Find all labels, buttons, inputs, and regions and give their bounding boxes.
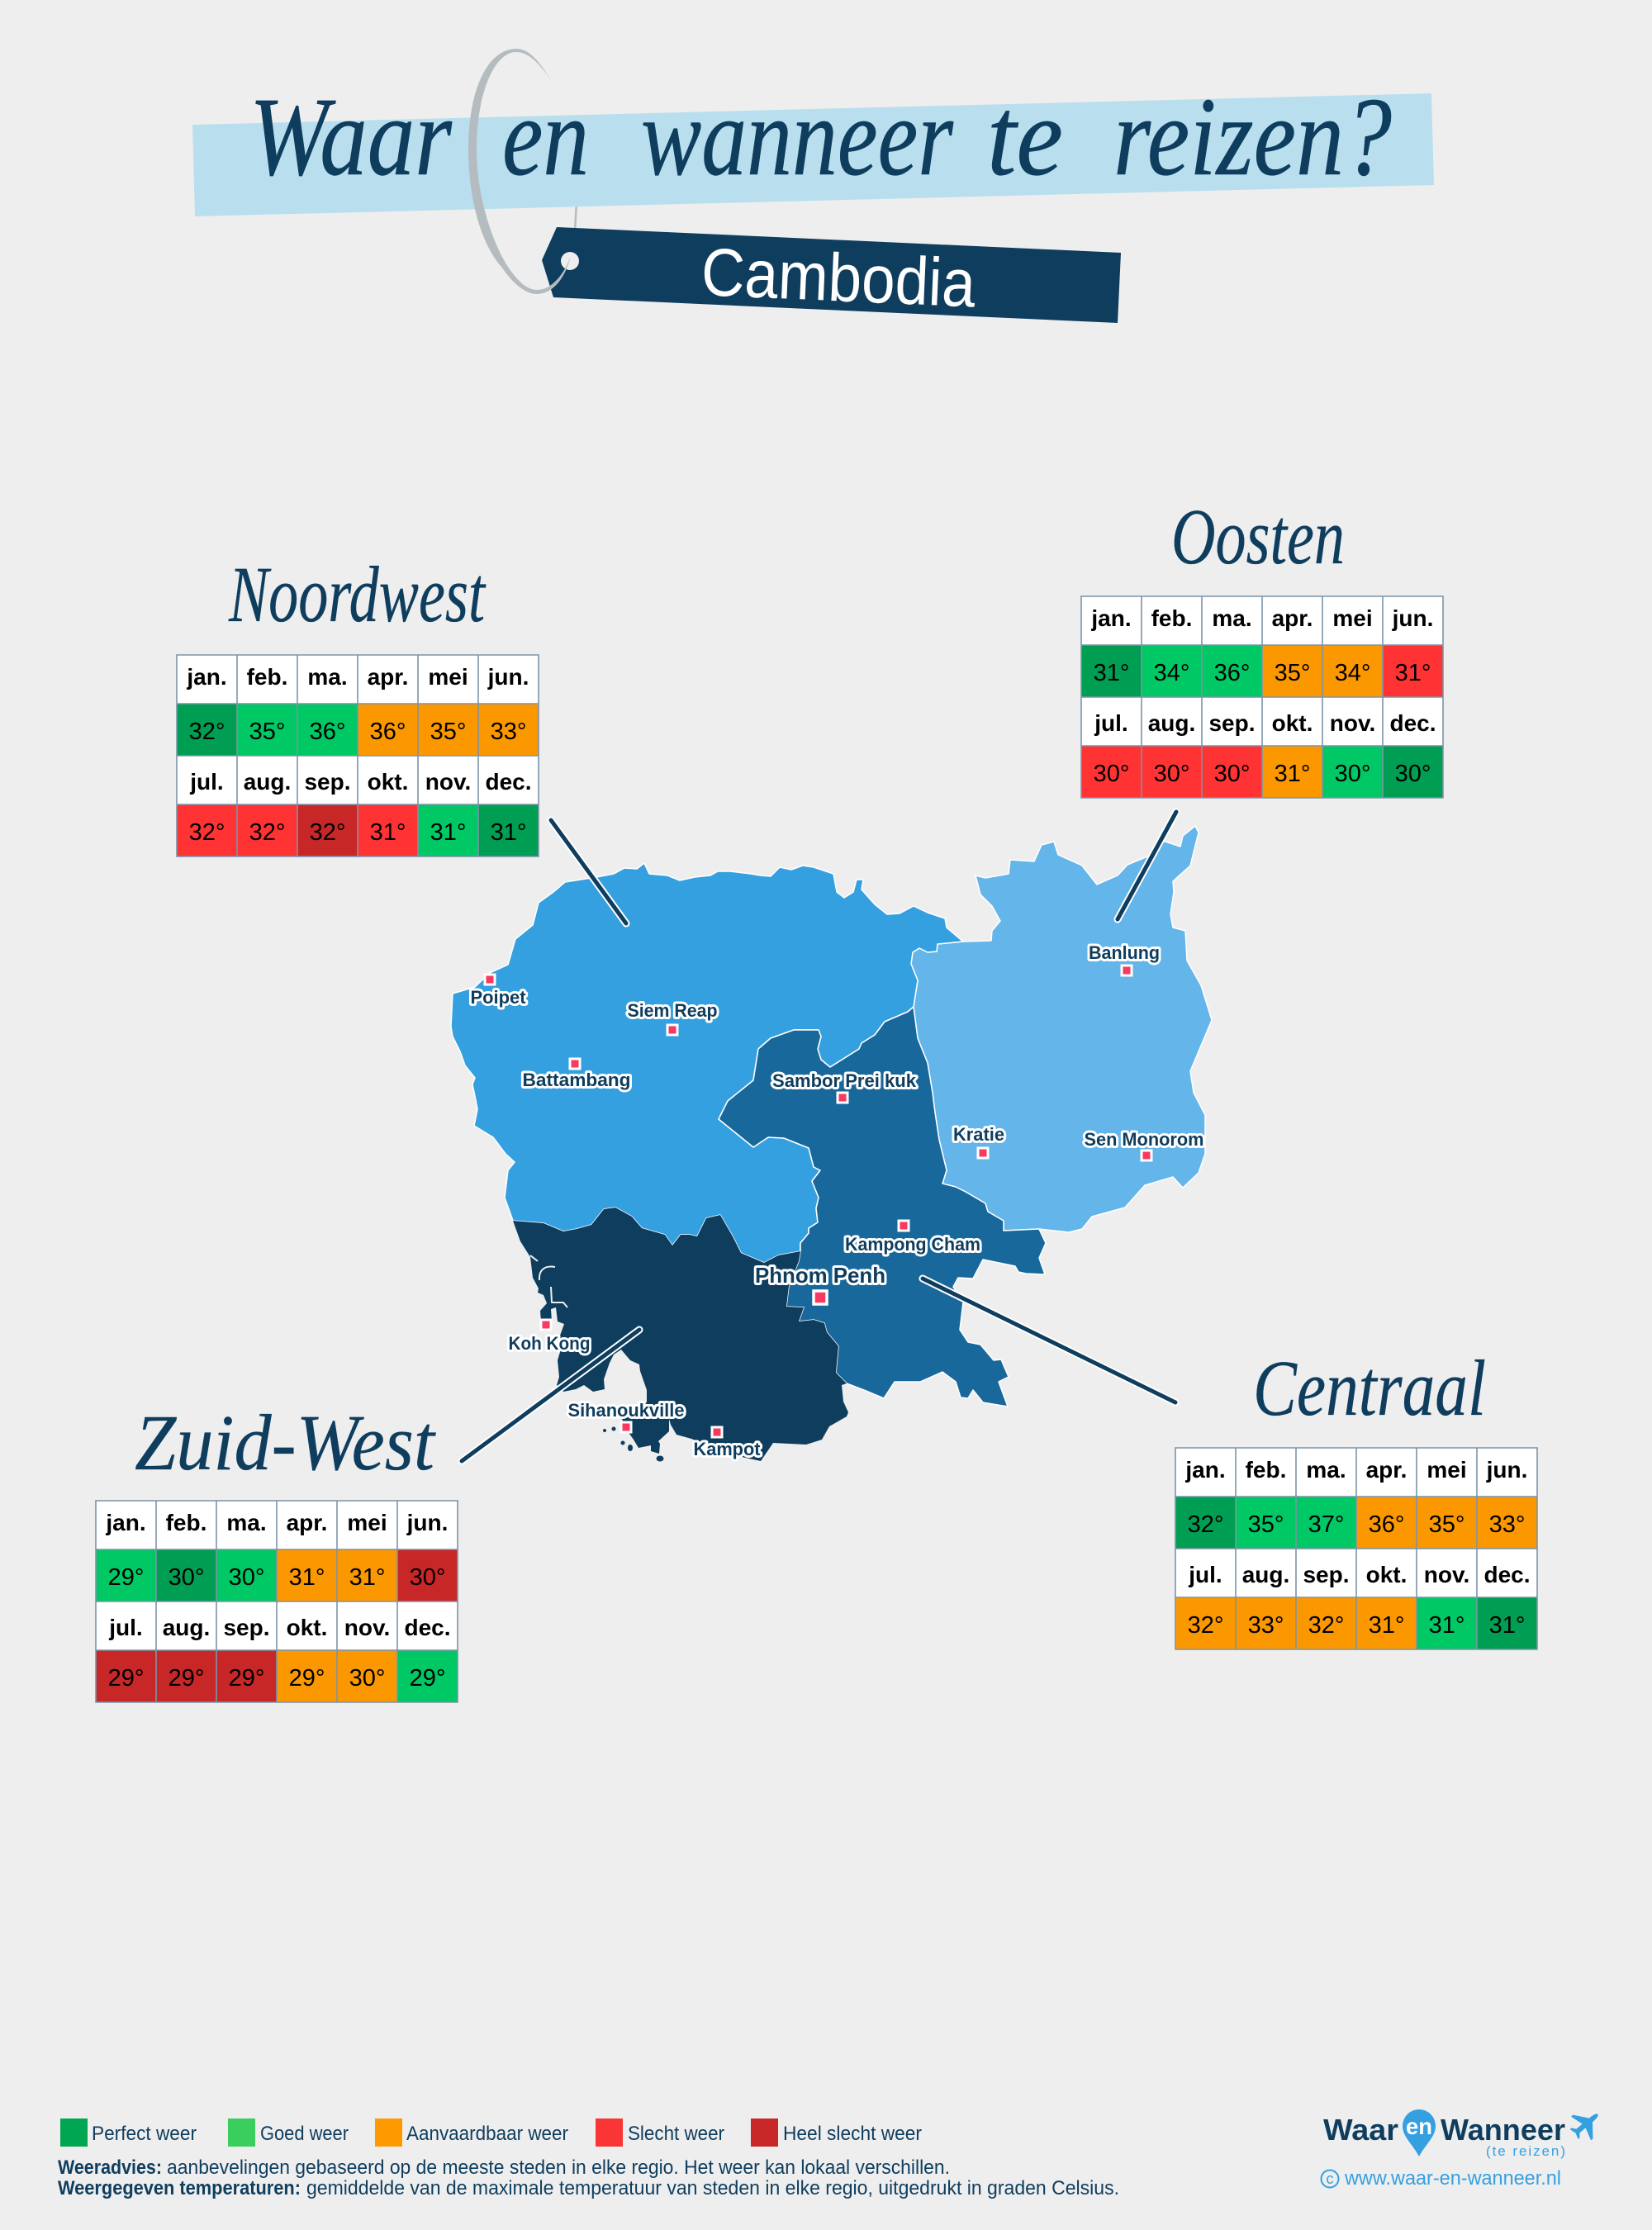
table: Centraal: 32° — [1308, 1612, 1344, 1639]
table: Oosten: 34° — [1154, 660, 1189, 686]
table: Oosten: aug. — [1148, 710, 1195, 736]
table: Zuid-West: 30° — [169, 1564, 204, 1591]
city: Sihanoukville — [568, 1400, 684, 1432]
table: Noordwest: nov. — [425, 769, 471, 795]
table: Centraal: 36° — [1369, 1511, 1404, 1538]
table: Centraal: jul. — [1188, 1562, 1222, 1587]
table: Oosten: apr. — [1272, 605, 1313, 631]
table: Zuid-West: 29° — [108, 1564, 144, 1591]
coastal inlets near Koh Kong — [530, 1255, 567, 1307]
table: Centraal: mei — [1427, 1457, 1467, 1483]
city: Sambor Prei kuk — [772, 1070, 917, 1103]
heading: Noordwest: Noordwest — [228, 550, 487, 638]
city: Sambor Prei kuk: Sambor Prei kuk — [772, 1070, 917, 1091]
table: Zuid-West: aug. — [163, 1615, 210, 1640]
table: Centraal: 33° — [1248, 1612, 1284, 1639]
table: Zuid-West: dec. — [404, 1615, 451, 1640]
city: Siem Reap: Siem Reap — [628, 1000, 717, 1021]
table: Oosten: 31° — [1395, 660, 1431, 686]
luggage tag string, rear part — [575, 202, 577, 231]
table: Zuid-West: 31° — [289, 1564, 325, 1591]
light blue title band — [192, 93, 1434, 216]
footnote: Weeradvies: Weeradvies: — [58, 2156, 162, 2179]
table: Centraal: aug. — [1242, 1562, 1289, 1587]
heading: Oosten: Oosten — [1171, 492, 1345, 581]
footnote: Weergegeven temperaturen: gemiddelde van de maximale temperatuur van steden in elke regio, uitgedrukt in graden Celsius. — [306, 2177, 1119, 2199]
table: Oosten: jul. — [1094, 710, 1128, 736]
arrow: Oosten leader line — [1118, 812, 1176, 919]
table: Zuid-West: jul. — [108, 1615, 143, 1640]
legend item: Aanvaardbaar weer — [375, 2118, 568, 2147]
table: Centraal: jan. — [1184, 1457, 1226, 1483]
table: Centraal: dec. — [1483, 1562, 1531, 1587]
table: Zuid-West: 29° — [289, 1665, 325, 1691]
table: Centraal: apr. — [1366, 1457, 1407, 1483]
website with copyright: c — [1327, 2171, 1333, 2187]
table: Noordwest: 31° — [430, 819, 466, 846]
city: Sen Monorom: Sen Monorom — [1084, 1129, 1204, 1150]
city: Kampot — [694, 1427, 761, 1459]
city: Poipet — [471, 975, 526, 1008]
table: Zuid-West: nov. — [344, 1615, 390, 1640]
city: Siem Reap — [628, 1000, 717, 1035]
luggage tag string, front loop — [468, 49, 571, 294]
table: Noordwest: 36° — [310, 719, 345, 745]
title banner — [192, 49, 1434, 323]
table: Zuid-West: jan. — [105, 1510, 146, 1535]
arrow: Noordwest leader line — [551, 820, 626, 923]
heading: Zuid-West: Zuid-West — [135, 1398, 436, 1487]
table: Zuid-West: mei — [347, 1510, 387, 1535]
title text: te — [987, 75, 1063, 199]
table: Centraal: 32° — [1188, 1511, 1223, 1538]
table: Zuid-West: 30° — [349, 1665, 385, 1691]
table: Zuid-West: ma. — [226, 1510, 267, 1535]
table: Noordwest: mei — [428, 664, 468, 690]
table: Noordwest: okt. — [368, 769, 408, 795]
table: Centraal: 35° — [1248, 1511, 1284, 1538]
city: Phnom Penh — [755, 1263, 885, 1304]
title text — [249, 75, 1392, 199]
table: Zuid-West: 30° — [229, 1564, 264, 1591]
table: Noordwest: feb. — [247, 664, 287, 690]
logo: Waar en Wanneer: Wanneer — [1441, 2113, 1565, 2147]
table: Oosten: 30° — [1214, 761, 1250, 787]
table: Centraal: nov. — [1424, 1562, 1469, 1587]
table: Zuid-West: jun. — [406, 1510, 448, 1535]
table: Centraal — [1175, 1448, 1537, 1649]
table: Zuid-West — [96, 1501, 458, 1702]
footnotes — [58, 2156, 1119, 2199]
table: Oosten: 30° — [1094, 761, 1129, 787]
table: Oosten: dec. — [1389, 710, 1436, 736]
arrow: Centraal leader line — [923, 1279, 1175, 1402]
map of Cambodia — [451, 826, 1212, 1462]
legend item: Heel slecht weer: Heel slecht weer — [783, 2123, 922, 2145]
region: Noordwest — [451, 863, 963, 1263]
table: Centraal: feb. — [1246, 1457, 1286, 1483]
footnote: Weeradvies: aanbevelingen gebaseerd op de meeste steden in elke regio. Het weer kan lokaal verschillen. — [167, 2156, 950, 2179]
table: Centraal: 33° — [1489, 1511, 1525, 1538]
table: Centraal: 35° — [1429, 1511, 1464, 1538]
city: Battambang: Battambang — [522, 1070, 631, 1090]
city labels and markers — [471, 942, 1204, 1459]
table: Noordwest: 32° — [249, 819, 285, 846]
city: Kratie: Kratie — [953, 1124, 1004, 1145]
table: Noordwest: 33° — [491, 719, 526, 745]
table: Oosten: sep. — [1208, 710, 1256, 736]
table: Oosten: nov. — [1330, 710, 1375, 736]
city: Kampong Cham — [845, 1221, 980, 1255]
luggage tag with country name — [542, 227, 1121, 323]
table: Noordwest: 32° — [310, 819, 345, 846]
region: Centraal — [719, 1007, 1046, 1407]
table: Oosten: 30° — [1154, 761, 1189, 787]
region: Oosten — [911, 826, 1212, 1232]
legend item: Perfect weer: Perfect weer — [92, 2123, 197, 2145]
legend item: Heel slecht weer — [751, 2118, 922, 2147]
table: Noordwest: 31° — [491, 819, 526, 846]
legend item: Perfect weer — [60, 2118, 197, 2147]
table: Centraal: sep. — [1303, 1562, 1350, 1587]
table: Centraal: 31° — [1489, 1612, 1525, 1639]
table: Zuid-West: apr. — [287, 1510, 327, 1535]
table: Centraal: okt. — [1366, 1562, 1407, 1587]
table: Zuid-West: 29° — [169, 1665, 204, 1691]
table: Noordwest: 36° — [370, 719, 406, 745]
table: Centraal: jun. — [1486, 1457, 1527, 1483]
legend — [60, 2118, 922, 2147]
table: Noordwest: jul. — [189, 769, 224, 795]
table: Centraal: 37° — [1308, 1511, 1344, 1538]
table: Noordwest: apr. — [368, 664, 408, 690]
table: Centraal: 31° — [1429, 1612, 1464, 1639]
table: Noordwest: sep. — [304, 769, 351, 795]
city: Banlung — [1089, 942, 1160, 975]
legend item: Goed weer: Goed weer — [260, 2123, 349, 2145]
region: Zuid-West — [513, 1208, 848, 1462]
table: Oosten: jun. — [1392, 605, 1433, 631]
table: Zuid-West: feb. — [166, 1510, 206, 1535]
table: Zuid-West: sep. — [223, 1615, 270, 1640]
table: Noordwest: ma. — [307, 664, 348, 690]
logo: Waar en Wanneer: Waar — [1323, 2113, 1398, 2147]
city: Kampot: Kampot — [694, 1439, 761, 1459]
table: Oosten: 30° — [1335, 761, 1370, 787]
table: Oosten: 36° — [1214, 660, 1250, 686]
table: Zuid-West: 30° — [410, 1564, 445, 1591]
title text: en — [502, 75, 589, 199]
table: Oosten: okt. — [1272, 710, 1313, 736]
table: Centraal: 31° — [1369, 1612, 1404, 1639]
table: Oosten: 35° — [1275, 660, 1310, 686]
table: Oosten: 31° — [1275, 761, 1310, 787]
table: Zuid-West: 29° — [108, 1665, 144, 1691]
legend item: Slecht weer: Slecht weer — [628, 2123, 724, 2145]
logo: Waar en Wanneer — [1322, 2103, 1607, 2190]
city: Battambang — [522, 1059, 631, 1090]
table: Noordwest: 35° — [249, 719, 285, 745]
city: Phnom Penh: Phnom Penh — [755, 1263, 885, 1288]
city: Sihanoukville: Sihanoukville — [568, 1400, 684, 1421]
table: Oosten: 31° — [1094, 660, 1129, 686]
table: Oosten — [1081, 596, 1443, 798]
table: Noordwest: 31° — [370, 819, 406, 846]
logo: Waar en Wanneer: (te reizen) — [1486, 2143, 1565, 2159]
city: Banlung: Banlung — [1089, 942, 1160, 963]
table: Zuid-West: 31° — [349, 1564, 385, 1591]
city: Kratie — [953, 1124, 1004, 1158]
islands — [603, 1427, 664, 1462]
table: Noordwest: dec. — [485, 769, 532, 795]
table: Zuid-West: 29° — [229, 1665, 264, 1691]
table: Oosten: 34° — [1335, 660, 1370, 686]
heading: Centraal: Centraal — [1253, 1344, 1486, 1432]
table: Oosten: mei — [1332, 605, 1373, 631]
table: Noordwest: 35° — [430, 719, 466, 745]
table: Noordwest: 32° — [189, 719, 225, 745]
icon: location pin: en — [1406, 2114, 1432, 2139]
table: Oosten: jan. — [1090, 605, 1132, 631]
website with copyright: www.waar-en-wanneer.nl — [1344, 2167, 1561, 2190]
city: Koh Kong: Koh Kong — [509, 1333, 590, 1354]
table: Oosten: 30° — [1395, 761, 1431, 787]
title text: reizen? — [1113, 75, 1392, 199]
table: Oosten: ma. — [1212, 605, 1252, 631]
arrow: Zuid-West leader line — [462, 1330, 639, 1461]
table: Oosten: feb. — [1151, 605, 1192, 631]
table: Centraal: ma. — [1306, 1457, 1346, 1483]
table: Noordwest: jan. — [186, 664, 227, 690]
table: Centraal: 32° — [1188, 1612, 1223, 1639]
table: Noordwest — [177, 655, 539, 856]
title text: wanneer — [641, 75, 954, 199]
icon: airplane — [1564, 2103, 1607, 2146]
table: Noordwest: 32° — [189, 819, 225, 846]
legend item: Goed weer — [228, 2118, 349, 2147]
title text: Waar — [249, 75, 453, 199]
table: Noordwest: aug. — [244, 769, 291, 795]
city: Sen Monorom — [1084, 1129, 1204, 1160]
icon: location pin — [1403, 2109, 1436, 2156]
table: Noordwest: jun. — [487, 664, 529, 690]
city: Poipet: Poipet — [471, 987, 526, 1008]
table: Zuid-West: okt. — [287, 1615, 327, 1640]
city: Koh Kong — [509, 1320, 590, 1354]
legend item: Slecht weer — [596, 2118, 724, 2147]
table: Zuid-West: 29° — [410, 1665, 445, 1691]
luggage tag with country name: Cambodia — [700, 235, 977, 321]
footnote: Weergegeven temperaturen: Weergegeven temperaturen: — [58, 2177, 301, 2199]
legend item: Aanvaardbaar weer: Aanvaardbaar weer — [406, 2123, 568, 2145]
city: Kampong Cham: Kampong Cham — [845, 1234, 980, 1255]
